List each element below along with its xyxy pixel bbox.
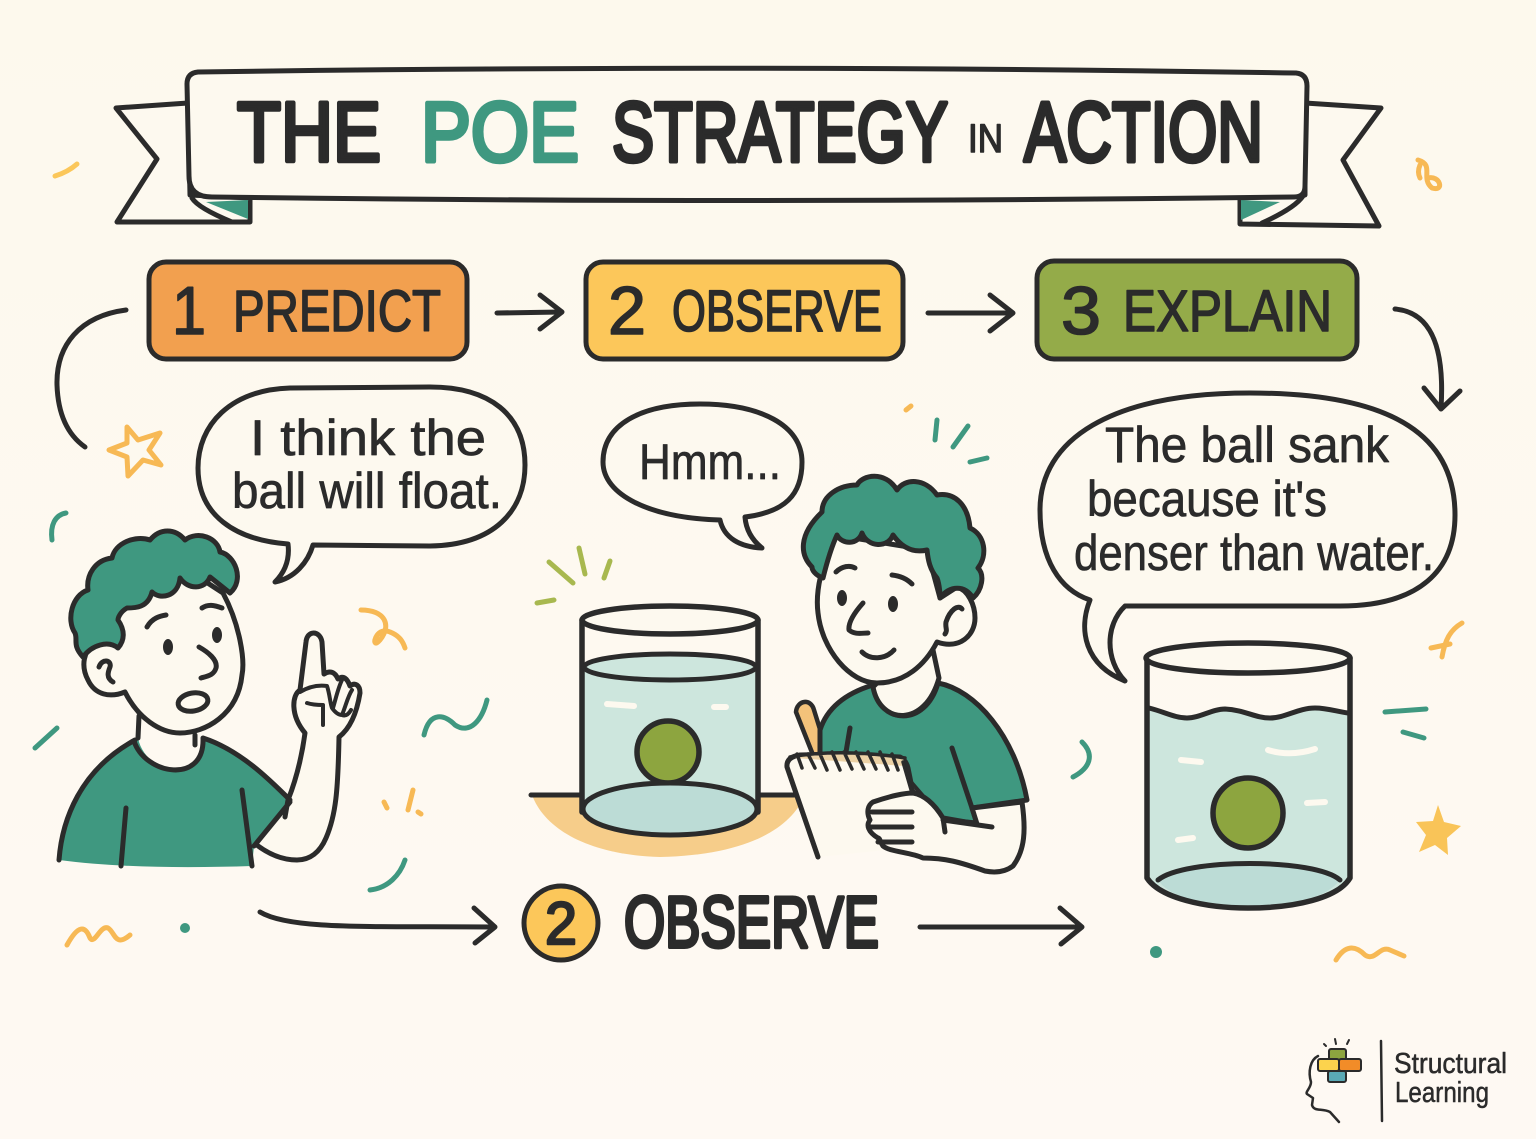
step 3: explain: 3 <box>1061 273 1101 349</box>
arrow: curve from predict to student <box>57 310 126 447</box>
step 2: observe: 2 <box>608 273 646 349</box>
character: predicting student <box>59 531 360 867</box>
star: yellow outline <box>109 427 161 476</box>
title text: THE <box>237 85 381 179</box>
ball <box>1213 778 1283 848</box>
highlights <box>607 704 726 707</box>
star: yellow solid <box>1416 805 1461 855</box>
arrow: observe to explain <box>928 295 1013 331</box>
accents above glass <box>537 548 610 603</box>
banner body <box>187 68 1307 200</box>
speech bubble: explanation: because it's <box>1087 471 1327 527</box>
logo head <box>1307 1056 1339 1122</box>
glass bottom <box>1158 864 1340 906</box>
title text: ACTION <box>1024 85 1263 179</box>
speech bubble: explanation: The ball sank <box>1105 417 1390 473</box>
bottom flow arrow: left <box>260 908 495 943</box>
bottom observe label: 2 <box>545 890 577 957</box>
water surface <box>1149 708 1348 718</box>
ribbon fold: right <box>1241 200 1280 220</box>
notepad spiral <box>790 752 912 793</box>
title text: POE <box>421 85 579 179</box>
mouth <box>177 691 209 713</box>
water <box>1149 708 1348 907</box>
shirt <box>820 683 1027 823</box>
step 2: observe: OBSERVE <box>672 279 882 344</box>
arrow: predict to observe <box>497 295 562 329</box>
arm and hand <box>868 793 1024 872</box>
finger lines <box>300 680 352 725</box>
hair <box>803 476 984 598</box>
step 1: predict <box>149 262 467 359</box>
table surface <box>532 795 805 857</box>
notepad <box>787 752 918 857</box>
ribbon fold: left <box>206 200 248 219</box>
eyes <box>163 639 173 655</box>
step 1: predict: PREDICT <box>233 279 441 344</box>
step 3: explain <box>1037 261 1357 359</box>
bottom flow arrow: right <box>920 908 1082 944</box>
step 3: explain: EXPLAIN <box>1123 279 1332 344</box>
water surface <box>584 654 756 680</box>
bottom observe label <box>524 883 879 963</box>
face <box>84 565 243 733</box>
glass with sunken ball <box>1146 643 1350 908</box>
shirt <box>59 738 290 867</box>
face details <box>99 605 222 682</box>
speech bubble: explanation <box>1040 393 1455 681</box>
speech bubble: explanation: denser than water. <box>1074 525 1434 581</box>
ribbon tail: left <box>116 103 250 222</box>
face <box>817 535 975 683</box>
ball <box>637 721 699 783</box>
title banner <box>116 68 1381 226</box>
glass outline <box>582 620 758 812</box>
arrow: curve from explain to bubble <box>1395 309 1460 409</box>
bottom observe label: OBSERVE <box>624 883 879 963</box>
logo divider <box>1381 1041 1382 1121</box>
step 2: observe <box>586 262 903 359</box>
step 1: predict: 1 <box>172 273 206 349</box>
glass with floating ball <box>582 606 758 835</box>
logo blocks <box>1329 1049 1346 1060</box>
neck <box>138 716 195 745</box>
glass rim <box>582 606 758 634</box>
neck <box>873 650 939 716</box>
logo: Structural Learning <box>1307 1039 1507 1122</box>
speech bubble: Hmm <box>603 404 802 548</box>
logo: Structural Learning: Learning <box>1395 1077 1489 1109</box>
logo sparks <box>1324 1039 1349 1046</box>
face details <box>836 566 962 658</box>
hair <box>71 531 237 657</box>
pencil <box>796 702 828 760</box>
highlights <box>1178 749 1325 840</box>
glass rim <box>1146 643 1350 673</box>
ribbon tail: right <box>1240 103 1381 226</box>
speech bubble: prediction <box>198 387 525 582</box>
title text: IN <box>968 117 1003 161</box>
speech bubble: Hmm: Hmm... <box>639 434 781 490</box>
water body <box>584 668 756 834</box>
eyes <box>837 590 847 606</box>
glass outline <box>1147 658 1350 908</box>
title text: STRATEGY <box>612 85 948 179</box>
character: observing student <box>787 476 1027 872</box>
title text <box>237 85 1263 179</box>
speech bubble: prediction: I think the <box>250 410 486 466</box>
logo wordmark: Structural <box>1394 1048 1507 1080</box>
finger lines <box>870 812 992 842</box>
speech bubble: prediction: ball will float. <box>232 463 502 519</box>
glass bottom <box>583 783 757 835</box>
arm and pointing hand <box>253 633 360 860</box>
decorative confetti <box>35 160 1462 960</box>
